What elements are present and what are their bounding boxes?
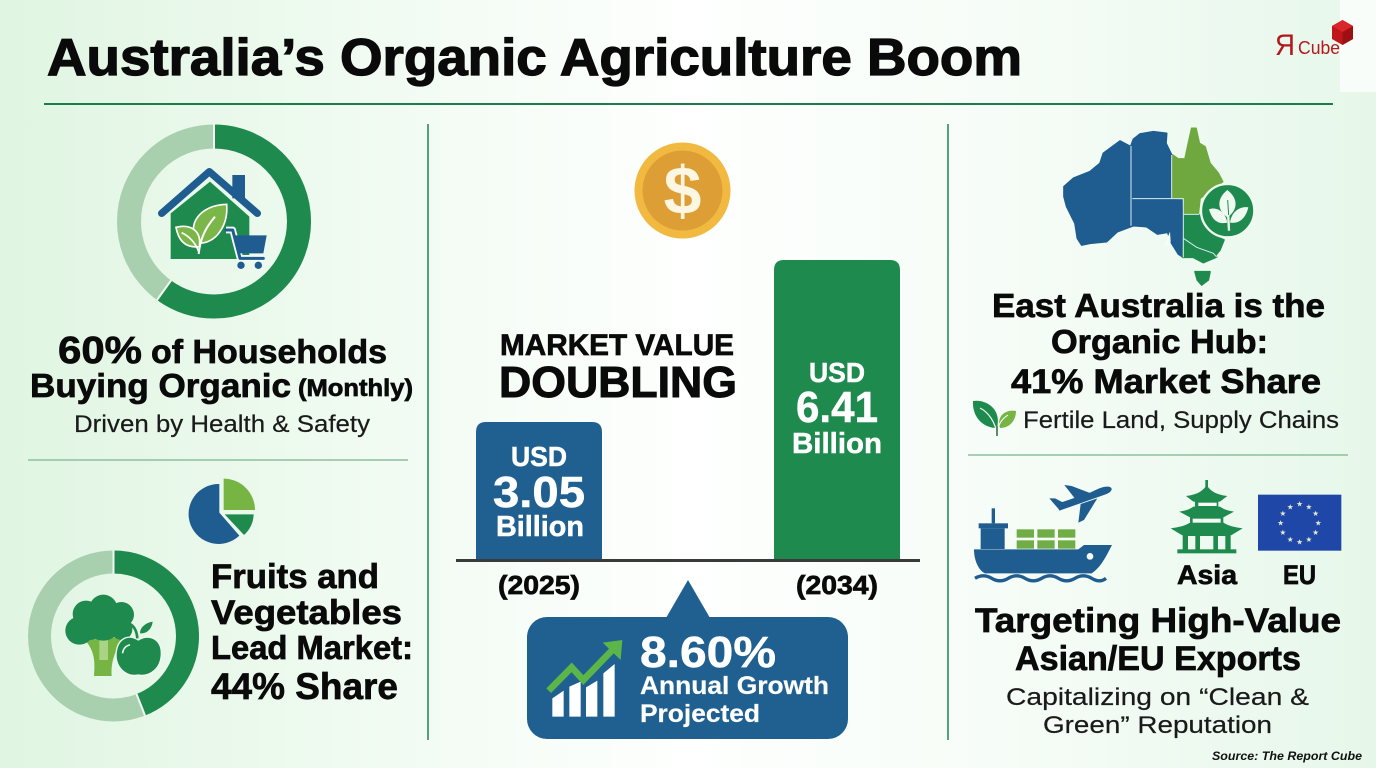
text: fruits and vegetables share: Vegetables <box>211 594 402 632</box>
icon: ship and plane <box>974 480 1341 581</box>
callout: annual growth: 8.60% <box>640 628 776 677</box>
bar: 2025: USD <box>511 441 567 472</box>
icon: EU flag: ★ <box>1287 535 1294 544</box>
text: 60% of households: of Households <box>151 333 387 370</box>
panel: exports <box>974 480 1341 739</box>
icon: EU flag: ★ <box>1312 528 1319 537</box>
text: organic hub: Organic Hub: <box>1051 323 1268 360</box>
icon: EU flag: ★ <box>1296 500 1303 509</box>
bar: 2034: USD <box>809 357 865 388</box>
text: fertile land: Fertile Land, Supply Chains <box>1023 407 1339 434</box>
bar: 2025 <box>476 422 602 560</box>
heading: market value doubling: MARKET VALUE <box>500 329 734 362</box>
label: Asia: Asia <box>1177 560 1238 590</box>
bar: 2034: 6.41 <box>796 383 878 432</box>
icon: sprout <box>973 401 1016 436</box>
bar: 2025: 3.05 <box>493 468 585 517</box>
chart: 60 percent donut <box>129 124 299 306</box>
panel: fruits and vegetables <box>40 479 413 716</box>
source note: Source: The Report Cube <box>1212 749 1362 763</box>
text: targeting exports <box>975 602 1341 739</box>
text: 60% of households: (Monthly) <box>298 375 413 402</box>
label: 2034: (2034) <box>796 570 878 600</box>
text: targeting exports: Capitalizing on “Clean & <box>1006 684 1309 711</box>
icon: EU flag: ★ <box>1296 537 1303 546</box>
text: fruits and vegetables share: Fruits and <box>211 558 379 596</box>
text: organic hub: East Australia is the <box>992 287 1325 324</box>
logo: RCube: Я <box>1275 29 1295 62</box>
text: targeting exports: Asian/EU Exports <box>1015 640 1301 678</box>
bar: 2034: Billion <box>792 428 882 460</box>
text: fruits and vegetables share: 44% Share <box>211 666 398 707</box>
text: 60% of households: 60% <box>58 330 142 372</box>
icon: growth chart arrow <box>549 640 622 717</box>
label: 2025: (2025) <box>498 570 580 600</box>
text: organic hub <box>992 287 1325 401</box>
callout: annual growth <box>527 580 848 739</box>
text: targeting exports: Green” Reputation <box>1043 712 1272 739</box>
panel: east australia <box>973 128 1339 436</box>
icon: EU flag: ★ <box>1312 509 1319 518</box>
icon: EU flag: ★ <box>1315 519 1322 528</box>
icon: EU flag: ★ <box>1280 509 1287 518</box>
title: Australia’s Organic Agriculture Boom <box>47 29 1022 87</box>
icon: EU flag: ★ <box>1280 528 1287 537</box>
panel: market value <box>456 142 920 739</box>
text: 60% of households: Buying Organic <box>30 367 291 404</box>
panel: households <box>30 124 413 438</box>
callout: annual growth: Projected <box>640 700 760 728</box>
icon: pagoda <box>1171 480 1243 553</box>
text: fruits and vegetables share <box>211 558 413 707</box>
logo: RCube <box>1275 20 1353 62</box>
icon: EU flag: ★ <box>1306 535 1313 544</box>
icon: broccoli and apple <box>65 595 161 676</box>
text: targeting exports: Targeting High-Value <box>975 602 1341 640</box>
map: Australia <box>1064 128 1254 285</box>
icon: EU flag <box>1258 495 1341 551</box>
chart: 44 percent donut <box>40 550 188 716</box>
text: organic hub: 41% Market Share <box>1011 363 1321 401</box>
icon: EU flag: ★ <box>1277 519 1284 528</box>
text: 60% of households: Driven by Health & Safety <box>74 411 370 438</box>
label: EU: EU <box>1283 560 1316 590</box>
icon: dollar coin <box>634 142 730 238</box>
callout: annual growth: Annual Growth <box>640 672 829 700</box>
heading: market value doubling <box>499 329 737 407</box>
heading: market value doubling: DOUBLING <box>499 358 737 407</box>
icon: leaf badge <box>1201 184 1254 237</box>
bar: 2034 <box>774 260 900 560</box>
text: 60% of households <box>30 330 413 438</box>
icon: pie chart <box>189 479 255 544</box>
icon: dollar coin: $ <box>664 153 701 229</box>
icon: EU flag: ★ <box>1287 502 1294 511</box>
icon: EU flag: ★ <box>1306 502 1313 511</box>
text: fruits and vegetables share: Lead Market: <box>211 629 413 666</box>
bar: 2025: Billion <box>496 511 584 543</box>
logo: RCube: Cube <box>1298 38 1340 58</box>
icon: house with leaf and cart <box>162 172 267 269</box>
